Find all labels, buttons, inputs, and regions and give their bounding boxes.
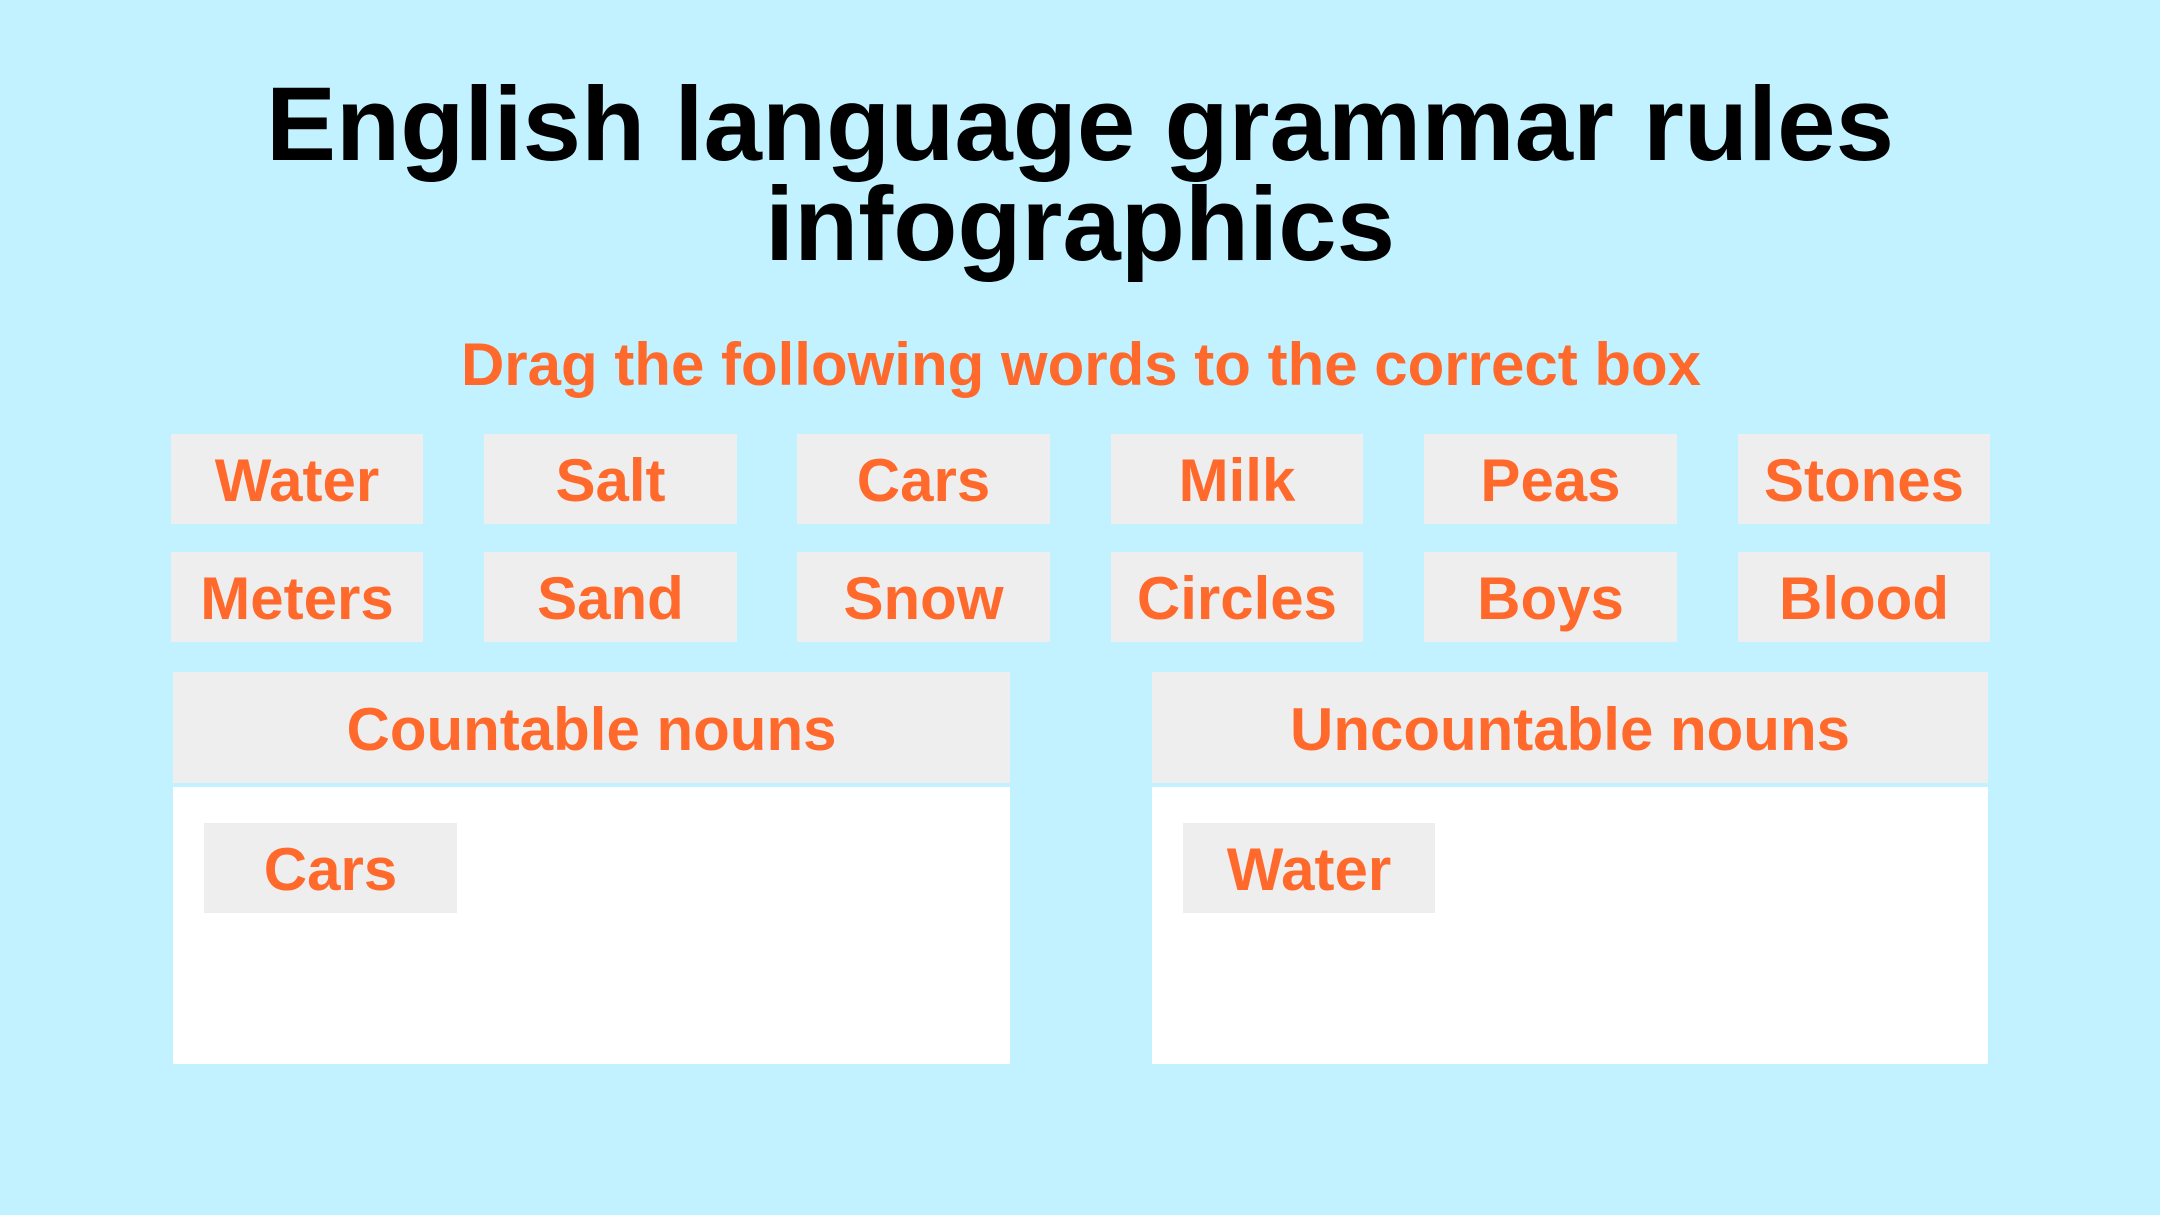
word chip: Stones [1738, 434, 1990, 524]
title [266, 66, 1894, 283]
word chip: Boys: Boys [1477, 565, 1624, 632]
word chip: Snow [797, 552, 1050, 642]
word chip: Circles: Circles [1137, 565, 1337, 632]
dropped word chip: Cars: Cars [264, 836, 397, 903]
word chip: Peas: Peas [1480, 447, 1621, 514]
dropped word chip: Water [1183, 823, 1435, 913]
word chip: Meters: Meters [200, 565, 394, 632]
word chip: Peas [1424, 434, 1677, 524]
word chip: Milk [1111, 434, 1363, 524]
panel header: Countable nouns [173, 672, 1010, 783]
word chip: Salt [484, 434, 737, 524]
panel header: Countable nouns: Countable nouns [347, 696, 836, 763]
word chip: Blood [1738, 552, 1990, 642]
word chip: Salt: Salt [555, 447, 666, 514]
word chip: Cars [797, 434, 1050, 524]
title: infographics [765, 166, 1395, 283]
word chip: Milk: Milk [1179, 447, 1295, 514]
dropped word chip: Water: Water [1227, 836, 1391, 903]
word chip: Stones: Stones [1764, 447, 1964, 514]
panel body: Countable nouns drop area [173, 787, 1010, 1064]
word chip: Water: Water [215, 447, 379, 514]
word chip: Water [171, 434, 423, 524]
panel header: Uncountable nouns [1152, 672, 1988, 783]
panel body: Uncountable nouns drop area [1152, 787, 1988, 1064]
word chip: Sand [484, 552, 737, 642]
word chip: Blood: Blood [1779, 565, 1949, 632]
subtitle instruction: Drag the following words to the correct box [461, 331, 1701, 398]
word chip: Snow: Snow [844, 565, 1004, 632]
word chip: Boys [1424, 552, 1677, 642]
word chip: Sand: Sand [537, 565, 684, 632]
word chip: Circles [1111, 552, 1363, 642]
title: English language grammar rules [266, 66, 1894, 183]
panel header: Uncountable nouns: Uncountable nouns [1290, 696, 1850, 763]
word chip: Cars: Cars [857, 447, 990, 514]
dropped word chip: Cars [204, 823, 457, 913]
word chip: Meters [171, 552, 423, 642]
